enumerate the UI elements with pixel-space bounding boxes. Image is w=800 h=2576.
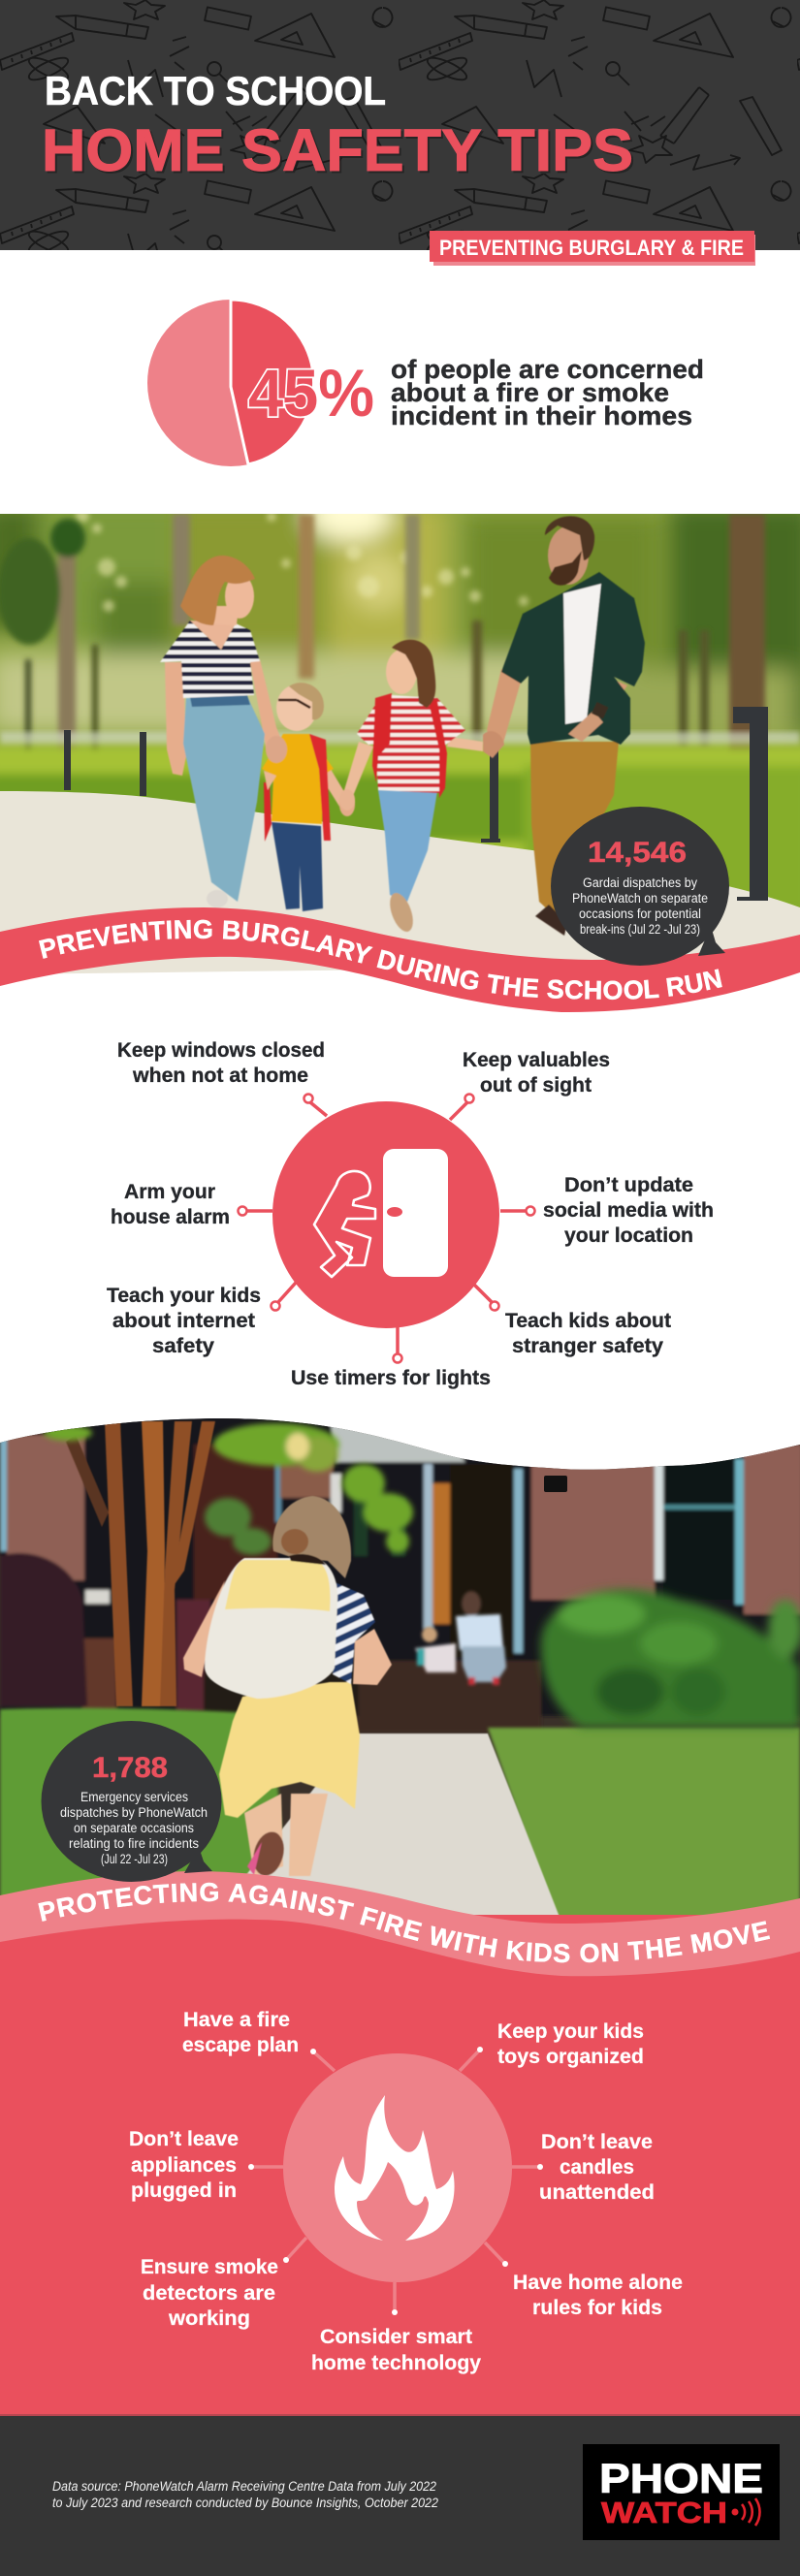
tip: valuables bbox=[463, 1049, 610, 1097]
diagram: fire tips bbox=[129, 2009, 683, 2374]
tip: social media: your location bbox=[564, 1224, 693, 1247]
title: home safety tips: HOME SAFETY TIPS bbox=[44, 119, 635, 185]
callout: 14,546 gardai dispatches: Gardai dispatches by bbox=[583, 875, 697, 890]
spokes bbox=[248, 2047, 543, 2315]
data source: to July 2023 and research conducted by Bounce Insights, October 2022 bbox=[52, 2496, 438, 2510]
girl with backpack bbox=[183, 1496, 392, 1879]
person: girl bbox=[339, 640, 483, 935]
tip: stranger safety bbox=[505, 1310, 671, 1357]
bokeh highlights bbox=[30, 509, 528, 612]
callout: 14,546 gardai dispatches: break-ins (Jul 22 -Jul 23) bbox=[580, 922, 700, 937]
diagram: burglary tips bbox=[107, 1039, 714, 1389]
callout: 1,788 emergency dispatches: Emergency services bbox=[80, 1790, 188, 1804]
callout: 14,546 gardai dispatches: occasions for potential bbox=[579, 906, 701, 921]
callout: 1,788 emergency dispatches: relating to fire incidents bbox=[69, 1836, 199, 1851]
bottom white ground bbox=[0, 970, 800, 1018]
footer panel bbox=[0, 2414, 800, 2576]
tip: candles: unattended bbox=[539, 2181, 655, 2204]
tip: home alone: rules for kids bbox=[532, 2297, 662, 2319]
tip: home alone bbox=[513, 2272, 683, 2319]
statistic: 45 percent: 45% bbox=[248, 356, 374, 430]
tip: valuables: out of sight bbox=[480, 1074, 592, 1097]
tip: appliances: plugged in bbox=[131, 2179, 237, 2202]
logo: PhoneWatch: WATCH bbox=[601, 2496, 727, 2529]
mini logo sign bbox=[544, 1476, 567, 1492]
tip: alarm: house alarm bbox=[111, 1206, 230, 1228]
statistic description: about a fire or smoke bbox=[391, 378, 669, 407]
tip: internet safety: Teach your kids bbox=[107, 1285, 261, 1307]
tip: escape plan: escape plan bbox=[182, 2034, 299, 2056]
callout: 1,788 emergency dispatches bbox=[41, 1721, 221, 1882]
lamp posts bbox=[64, 707, 768, 901]
photo background: park bbox=[0, 514, 800, 973]
tip: stranger safety: stranger safety bbox=[512, 1335, 663, 1357]
title: back to school: BACK TO SCHOOL bbox=[45, 68, 386, 113]
tip: alarm bbox=[111, 1181, 230, 1228]
tip: appliances bbox=[129, 2128, 239, 2202]
tip: home alone: Have home alone bbox=[513, 2272, 683, 2294]
tip: appliances: appliances bbox=[131, 2154, 237, 2177]
tip: escape plan: Have a fire bbox=[183, 2009, 290, 2031]
tip: internet safety: safety bbox=[152, 1335, 214, 1357]
panel: header bbox=[0, 0, 800, 266]
tip: social media: Don’t update bbox=[564, 1174, 693, 1196]
tip: stranger safety: Teach kids about bbox=[505, 1310, 671, 1332]
tip: internet safety bbox=[107, 1285, 261, 1357]
tip: candles bbox=[539, 2131, 655, 2204]
green shrubs bbox=[541, 1589, 800, 1728]
tip: smoke detectors: Ensure smoke bbox=[141, 2256, 278, 2278]
photo: girl walking from home bbox=[0, 1418, 800, 1915]
walking path bbox=[0, 791, 800, 973]
hub circle with flame icon bbox=[283, 2053, 512, 2282]
tip: toys: toys organized bbox=[497, 2046, 644, 2068]
tip: timers: Use timers for lights bbox=[291, 1367, 491, 1389]
trees bbox=[66, 1421, 215, 1706]
callout: 1,788 emergency dispatches: (Jul 22 -Jul 23) bbox=[101, 1852, 168, 1866]
tip: social media bbox=[543, 1174, 714, 1247]
foliage bbox=[44, 1423, 413, 1555]
tip: smoke detectors: working bbox=[168, 2307, 250, 2330]
tip: smart home: Consider smart bbox=[320, 2326, 472, 2348]
tip: windows: when not at home bbox=[132, 1065, 308, 1087]
pie chart: 45 percent bbox=[147, 300, 314, 466]
callout: 14,546 gardai dispatches: 14,546 bbox=[588, 837, 687, 869]
callout: 14,546 gardai dispatches bbox=[551, 807, 729, 966]
tip: smart home bbox=[311, 2326, 481, 2374]
photo: family walking to school bbox=[0, 514, 800, 973]
subtitle tag: PREVENTING BURGLARY & FIRE bbox=[439, 236, 744, 260]
tip: smoke detectors: detectors are bbox=[143, 2282, 275, 2305]
data source: Data source: PhoneWatch Alarm Receiving Centre Data from July 2022 bbox=[52, 2479, 436, 2494]
title: home safety tips: HOME SAFETY TIPS bbox=[42, 117, 633, 183]
tip: escape plan bbox=[182, 2009, 299, 2056]
lawn and walkway bbox=[0, 1708, 800, 1939]
seated parent and child bbox=[415, 1591, 506, 1685]
callout: 1,788 emergency dispatches: 1,788 bbox=[92, 1752, 168, 1784]
logo: PhoneWatch: PHONE bbox=[599, 2456, 763, 2502]
tip: alarm: Arm your bbox=[124, 1181, 215, 1203]
tip: smart home: home technology bbox=[311, 2352, 481, 2374]
tip: internet safety: about internet bbox=[112, 1310, 255, 1332]
tip: candles: Don’t leave bbox=[541, 2131, 653, 2153]
callout: 1,788 emergency dispatches: on separate occasions bbox=[74, 1821, 194, 1835]
tip: toys bbox=[497, 2020, 644, 2068]
tip: smoke detectors bbox=[141, 2256, 278, 2330]
data source bbox=[52, 2479, 438, 2510]
banner text: PREVENTING BURGLARY DURING THE SCHOOL RUN bbox=[39, 919, 722, 1001]
hub circle with burglar and door icon bbox=[272, 1101, 499, 1328]
banner: protecting against fire bbox=[0, 1871, 800, 1976]
banner: preventing burglary bbox=[0, 907, 800, 1012]
spokes bbox=[239, 1094, 535, 1363]
subtitle tag bbox=[430, 231, 755, 266]
red panel: fire safety bbox=[0, 1915, 800, 2419]
tip: toys: Keep your kids bbox=[497, 2020, 644, 2043]
person: father bbox=[483, 516, 645, 936]
statistic description: of people are concerned bbox=[391, 355, 704, 384]
statistic description: incident in their homes bbox=[391, 401, 692, 430]
tip: appliances: Don’t leave bbox=[129, 2128, 239, 2150]
house bbox=[0, 1396, 800, 1733]
tip: windows: Keep windows closed bbox=[117, 1039, 325, 1062]
tip: windows bbox=[117, 1039, 325, 1087]
tip: candles: candles bbox=[560, 2156, 634, 2178]
tip: valuables: Keep valuables bbox=[463, 1049, 610, 1071]
tip: social media: social media with bbox=[543, 1199, 714, 1222]
person: mother bbox=[160, 556, 287, 907]
person: boy bbox=[262, 683, 355, 911]
banner text: PROTECTING AGAINST FIRE WITH KIDS ON THE MOVE bbox=[38, 1883, 770, 1962]
statistic description bbox=[391, 355, 704, 430]
callout: 1,788 emergency dispatches: dispatches by PhoneWatch bbox=[60, 1805, 208, 1820]
logo: PhoneWatch bbox=[583, 2444, 780, 2540]
callout: 14,546 gardai dispatches: PhoneWatch on separate bbox=[572, 891, 708, 906]
